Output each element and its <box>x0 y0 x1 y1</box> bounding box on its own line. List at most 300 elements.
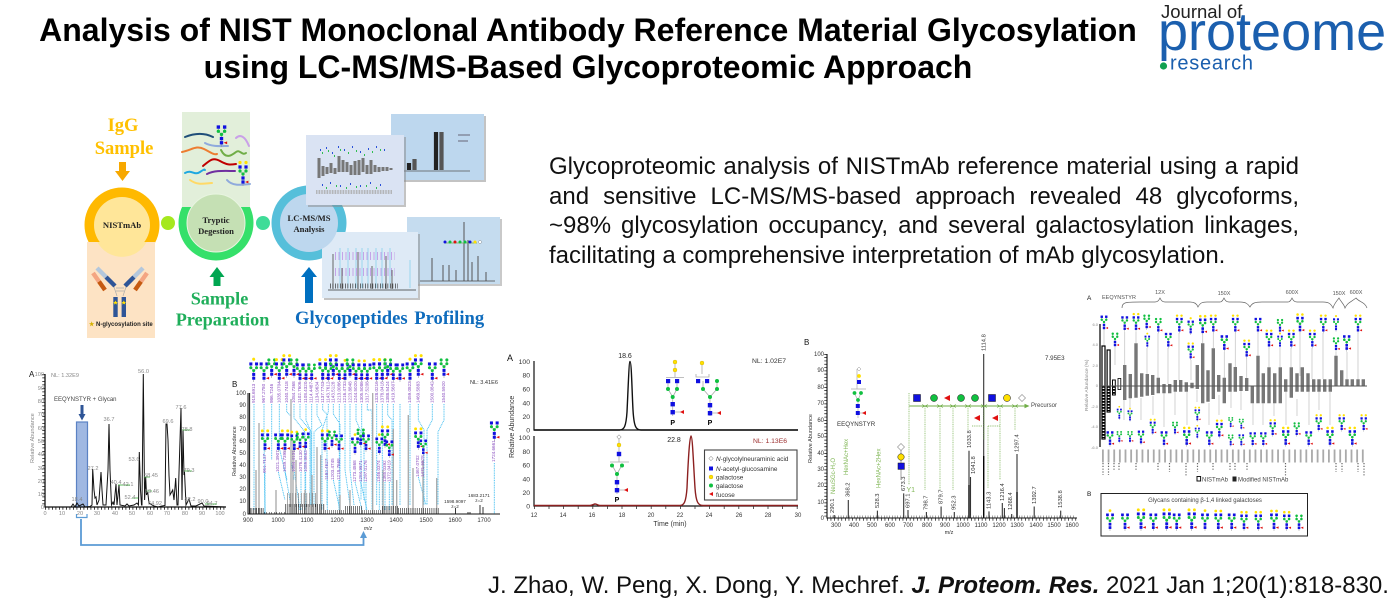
top m/z labels: 1469.5883 <box>416 381 420 403</box>
y tick labels <box>519 359 530 510</box>
x tick labels: 300 <box>831 523 842 529</box>
top m/z labels: 1035.0704 <box>276 381 282 403</box>
x tick labels: 1100 <box>975 523 988 529</box>
thumbnail legend <box>458 135 470 141</box>
y tick labels: 60 <box>522 386 530 394</box>
thumbnail shadow <box>308 137 406 207</box>
y tick labels: 40 <box>817 451 825 457</box>
axis tick labels <box>243 518 491 524</box>
logo text: Journal of: Journal of <box>1161 1 1243 22</box>
zero line <box>1100 385 1367 387</box>
connector dot 2 <box>256 216 270 230</box>
axis tick labels: 1100 <box>301 518 314 524</box>
y axis title: Relative Abundance <box>232 426 238 476</box>
panel letter: B <box>232 380 237 389</box>
lower m/z labels: 951.7137 <box>262 453 267 473</box>
thumbnail: glycan bar chart <box>306 135 406 207</box>
glycan structure 1 <box>666 360 684 427</box>
label: Glycopeptides Profiling: Glycopeptides Profiling <box>295 308 485 329</box>
label: IgG Sample: IgG <box>108 116 138 136</box>
axis tick labels: 50 <box>129 511 135 517</box>
y axis <box>1099 324 1101 447</box>
legend: NISTmAb <box>1202 478 1229 484</box>
x tick labels: 18 <box>619 513 626 519</box>
y tick labels: 20 <box>38 479 44 485</box>
lower m/z labels: 1372.0419 <box>386 460 392 482</box>
top m/z labels: 1216.4732 <box>342 381 347 403</box>
top m/z labels: 1108.4320 <box>303 381 308 403</box>
lower m/z labels: 1346.0374 <box>376 460 381 482</box>
x axis title: m/z <box>364 526 373 532</box>
black noise <box>250 393 483 514</box>
x tick labels: 20 <box>648 513 655 519</box>
peak labels: 952.3 <box>952 495 958 510</box>
x tick labels: 400 <box>849 523 860 529</box>
NL bottom: NL: 1.13E6 <box>753 438 787 445</box>
x tick labels: 600 <box>885 523 896 529</box>
charge labels: 1683.2171 <box>468 493 490 498</box>
top m/z labels: 918.6913 <box>251 383 256 403</box>
y tick labels: 70 <box>817 401 825 407</box>
lower m/z labels: 1471.5828 <box>420 455 425 477</box>
fragment labels green: Y1 <box>906 487 915 494</box>
axis tick labels: 100 <box>215 511 225 517</box>
panel letter: B <box>1087 491 1091 498</box>
peak labels: 82.2 <box>185 497 195 503</box>
y tick labels <box>236 391 247 518</box>
peak labels: 36.7 <box>104 417 114 423</box>
citation: J. Zhao, W. Peng, X. Dong, Y. Mechref. J. Proteom. Res. 2021 Jan 1;20(1):818-830. <box>488 572 1389 599</box>
thumbnail axis <box>400 170 470 172</box>
top trace <box>534 362 798 430</box>
y tick labels: 30 <box>38 466 44 472</box>
glycan structure 3 <box>610 435 629 504</box>
legend: fucose <box>716 492 735 499</box>
lower glycans <box>261 421 499 458</box>
gray spectrum peaks <box>256 393 437 514</box>
y tick labels: 90 <box>239 403 247 409</box>
thumbnail cyan guides <box>340 248 410 288</box>
panel: galactose linkage glycans <box>1087 491 1308 536</box>
y axis title: Relative Abundance <box>509 396 516 458</box>
thumbnail: annotated MS1 spectrum <box>322 232 420 300</box>
cyan guide lines <box>254 404 494 514</box>
peak labels: 78.8 <box>182 427 192 433</box>
y tick labels: 80 <box>38 399 44 405</box>
lower m/z labels: 1724.6661 <box>491 440 496 462</box>
y tick labels: 40 <box>522 476 530 484</box>
fragment labels green: NeuSGc-H₂O <box>831 458 837 494</box>
y tick labels: -6.0 <box>1091 445 1099 450</box>
logo text: research: research <box>1170 52 1253 74</box>
LC-MS ring <box>272 186 346 260</box>
panel letter: A <box>1087 295 1092 302</box>
glycan structure 1: P <box>670 420 675 427</box>
y tick labels: 0 <box>41 505 44 511</box>
composition label columns <box>1102 450 1365 462</box>
axis tick labels: 90 <box>199 511 205 517</box>
logo dot <box>1160 62 1167 70</box>
x tick labels: 1200 <box>992 523 1006 529</box>
y axis ticks <box>824 354 827 518</box>
y tick labels: 50 <box>38 439 44 445</box>
glycan structure 2: P <box>708 420 713 427</box>
peak labels: 59.46 <box>145 489 159 495</box>
axis tick labels: 10 <box>59 511 65 517</box>
label: Precursor: Precursor <box>1031 403 1057 409</box>
y tick labels: 20 <box>817 483 825 489</box>
y tick labels: 100 <box>35 372 44 378</box>
thumbnail glycan dots green <box>322 150 381 188</box>
y tick labels: 20 <box>522 414 530 421</box>
charge labels <box>444 493 490 509</box>
axis tick labels: 0 <box>43 511 47 517</box>
x tick labels <box>831 523 1079 529</box>
NISTmAb peach panel <box>87 242 155 338</box>
black peak bases <box>969 456 1017 518</box>
y axis title: Relative Abundance <box>808 414 814 463</box>
scale labels <box>1155 290 1363 297</box>
panel: workflow sample step <box>84 116 160 338</box>
y tick labels: 60 <box>522 462 530 470</box>
peak labels: 1216.4 <box>1000 482 1006 501</box>
axis tick labels: 1000 <box>271 518 285 524</box>
summary text block <box>549 153 1299 269</box>
axis tick labels: 1400 <box>389 518 403 524</box>
lower m/z labels: 1076.4130 <box>298 450 303 472</box>
bottom axes <box>534 436 798 506</box>
label: Sample Preparation <box>176 288 269 330</box>
summary text block: ~98% glycosylation occupancy, and several galactosylation linkages, <box>549 212 1299 239</box>
y tick labels <box>814 352 825 522</box>
axis tick labels: 900 <box>243 518 254 524</box>
top m/z labels <box>251 381 446 403</box>
peptides with glycans <box>182 134 250 185</box>
top m/z labels: 1244.5020 <box>353 381 358 403</box>
peak labels: 18.4 <box>72 497 82 503</box>
axis tick labels: 70 <box>164 511 170 517</box>
peak labels: 56.0 <box>138 369 149 375</box>
NISTmAb centre <box>94 197 150 253</box>
thumbnail: annotated MS2 spectrum <box>407 217 502 286</box>
braces <box>1122 298 1367 308</box>
scale labels: 150X <box>1218 291 1231 297</box>
peak labels: 697.1 <box>906 493 912 508</box>
peak labels: 40.4 <box>111 480 121 486</box>
peak labels: 94.7 <box>207 501 217 507</box>
lower m/z labels: 1273.4868 <box>352 460 357 482</box>
y tick labels: 60 <box>817 418 825 424</box>
connector lines <box>1104 331 1358 427</box>
arrow: preparation up <box>210 267 224 286</box>
panel letter: A <box>507 353 513 363</box>
plus markers <box>1103 463 1364 477</box>
y tick labels: 40 <box>38 452 44 458</box>
thumbnail background <box>306 135 404 205</box>
glycans below <box>1107 406 1367 447</box>
legend: N-glycolylneuraminic acid <box>716 456 789 463</box>
thumbnail purple labels <box>335 256 395 272</box>
icon: antibody <box>93 268 147 317</box>
top axes <box>534 361 798 430</box>
tryptic ring <box>178 186 254 260</box>
top glycans <box>249 354 449 382</box>
y tick labels: 80 <box>522 449 530 456</box>
axis tick labels: 80 <box>182 511 188 517</box>
link line <box>81 519 364 545</box>
label: LC-MS/MS Analysis: Analysis <box>293 224 325 234</box>
lower m/z labels: 1297.0176 <box>363 460 368 482</box>
axis tick labels: 1700 <box>477 518 491 524</box>
peak labels: 1297.4 <box>1014 433 1020 452</box>
x tick labels: 1400 <box>1029 523 1043 529</box>
glycans above <box>1101 313 1362 360</box>
open bars <box>1102 346 1121 439</box>
axis tick labels <box>43 511 225 517</box>
x tick labels: 500 <box>867 523 878 529</box>
x tick labels <box>531 513 802 519</box>
axis tick labels: 20 <box>77 511 83 517</box>
peak labels: 1143.3 <box>986 492 992 509</box>
axes <box>45 374 226 507</box>
chromatogram trace <box>45 374 226 507</box>
lower m/z labels: 1467.0702 <box>415 455 420 477</box>
NL value: NL: 3.41E6 <box>470 380 498 386</box>
y axis title: Relative Abundance (%) <box>1084 359 1090 411</box>
lower m/z labels: 1084.4131 <box>291 450 296 472</box>
x tick labels: 30 <box>795 513 802 519</box>
top m/z labels: 1388.5424 <box>385 381 390 403</box>
top m/z labels: 1040.7418 <box>284 381 289 403</box>
panel letter: B <box>804 338 809 347</box>
y tick labels: -2.0 <box>1091 404 1099 409</box>
axis tick labels: 40 <box>112 511 118 517</box>
y tick labels <box>1091 322 1099 450</box>
lower m/z labels: 1365.0392 <box>382 460 387 482</box>
peak labels: 1392.7 <box>1032 486 1038 504</box>
x tick labels: 14 <box>560 513 567 519</box>
scale labels: 600X <box>1286 290 1299 296</box>
axes <box>827 354 1077 518</box>
y tick labels: 6.0 <box>1092 322 1099 327</box>
y tick labels: 80 <box>817 385 825 391</box>
intensity: 7.95E3 <box>1045 355 1065 362</box>
thumbnail guides <box>445 242 477 244</box>
x tick labels: 26 <box>736 513 743 519</box>
peak labels: 27.2 <box>88 466 98 472</box>
top m/z labels: 1143.5128 <box>330 381 336 403</box>
arrow: link A to B <box>76 514 367 545</box>
thumbnail axis <box>420 280 495 282</box>
peak labels: 64.92 <box>148 501 162 507</box>
fragment labels green: HexNAc+2Hex <box>876 448 882 488</box>
x tick labels: 28 <box>765 513 772 519</box>
y tick labels: 30 <box>817 467 825 473</box>
top m/z labels: 1459.0823 <box>407 381 412 403</box>
connector dot 1 <box>161 216 175 230</box>
y tick labels: 70 <box>239 427 247 433</box>
charge labels: z=2 <box>475 498 483 503</box>
top m/z labels: 1137.7743 <box>320 381 325 403</box>
lower m/z labels: 1021.3907 <box>275 450 280 472</box>
peak labels: 53.6 <box>129 457 139 463</box>
y tick labels: 10 <box>817 500 825 506</box>
y tick labels: 30 <box>239 475 247 481</box>
top m/z labels: 1114.4487 <box>308 382 314 403</box>
scale labels: 600X <box>1350 290 1363 296</box>
thumbnail background <box>407 217 500 284</box>
journal logo <box>1158 1 1386 74</box>
x tick labels: 1000 <box>956 523 970 529</box>
x tick labels: 16 <box>589 513 596 519</box>
y tick labels: 60 <box>38 426 44 432</box>
NL top: NL: 1.02E7 <box>752 358 786 365</box>
lower m/z labels <box>262 440 496 482</box>
y tick labels <box>35 372 44 511</box>
fragment symbols <box>914 394 1026 421</box>
scale labels: 150X <box>1333 291 1346 297</box>
tick marks <box>45 507 226 510</box>
top m/z labels: 1317.5208 <box>364 381 370 403</box>
legend: N-acetyl-glucosamine <box>716 466 778 473</box>
logo text: proteome: proteome <box>1158 2 1386 62</box>
peak labels <box>830 334 1064 513</box>
peak labels: 528.3 <box>875 493 881 508</box>
y tick labels: 0 <box>526 428 530 434</box>
y tick labels: 2.0 <box>1092 363 1099 368</box>
thumbnail background <box>322 232 418 298</box>
retention labels: 18.6 <box>618 353 632 360</box>
top m/z labels: 1305.5086 <box>359 381 364 403</box>
LC-MS centre <box>280 194 338 252</box>
x ticks <box>534 506 798 509</box>
peak labels: 90.0 <box>198 499 208 505</box>
y tick labels: 0 <box>243 512 247 518</box>
baseline noise <box>830 516 1074 518</box>
thumbnail noise <box>330 284 398 288</box>
glycan B <box>238 161 248 186</box>
chart: glycan abundance butterfly <box>1084 290 1367 484</box>
lower m/z labels: 1089.8663 <box>303 450 308 472</box>
y tick labels: 0 <box>821 516 825 522</box>
chart: base peak chromatogram A <box>29 369 226 517</box>
label: IgG Sample: Sample <box>95 139 153 159</box>
thumbnail shadow <box>324 234 420 300</box>
lower m/z labels: 1182.4527 <box>324 458 329 480</box>
retention labels <box>618 353 681 444</box>
thumbnail shadow <box>409 219 502 286</box>
thumbnail labels <box>316 190 392 194</box>
label: Sample Preparation: Preparation <box>176 310 269 330</box>
top m/z labels: 1143.7612 <box>326 381 330 403</box>
panel: workflow preparation step <box>176 112 269 330</box>
charge labels: 1598.9097 <box>444 499 466 504</box>
y tick labels: 50 <box>817 434 825 440</box>
peak labels: 77.6 <box>176 405 186 411</box>
y tick labels: 20 <box>239 487 247 493</box>
fragment glycan on peak <box>898 444 904 480</box>
thumbnail peaks <box>432 222 486 281</box>
y tick labels: 100 <box>236 391 247 397</box>
thumbnail glycan dots blue <box>320 147 385 186</box>
lower m/z labels: 1039.7398 <box>282 450 287 472</box>
legend: galactose <box>716 483 744 490</box>
arrow head <box>360 531 367 538</box>
peaks <box>834 354 1061 518</box>
y tick labels: 60 <box>239 439 247 445</box>
peak labels: 52.4 <box>125 495 135 501</box>
y tick labels: 40 <box>522 400 530 408</box>
peak labels: 1041.8 <box>971 456 977 474</box>
top m/z labels: 986.7246 <box>269 383 274 403</box>
legend: galactose <box>716 474 744 482</box>
y tick labels: 100 <box>519 435 530 442</box>
lower m/z labels: 1284.9871 <box>358 460 363 482</box>
y tick labels: 80 <box>239 415 247 421</box>
y tick labels: 0 <box>1096 383 1099 388</box>
top m/z labels: 967.2780 <box>261 383 266 403</box>
thumbnail bars <box>319 156 391 178</box>
y tick labels: 40 <box>239 463 247 469</box>
retention labels: 22.8 <box>667 437 681 444</box>
x tick labels: 22 <box>677 513 684 519</box>
thumbnail symbols row <box>444 240 482 244</box>
arrow: to highlighted peak <box>78 405 86 420</box>
axis tick labels: 1200 <box>330 518 344 524</box>
axis tick labels: 1300 <box>360 518 374 524</box>
x tick labels: 12 <box>531 513 538 519</box>
axes <box>248 393 500 514</box>
glycan structure 3: P <box>615 497 620 504</box>
glycan A <box>217 125 227 147</box>
lower m/z labels: 1203.4745 <box>330 458 335 480</box>
scale labels: 12X <box>1155 290 1165 296</box>
y tick labels: 100 <box>519 359 530 366</box>
NISTmAb ring <box>84 188 160 262</box>
axis tick labels: 30 <box>94 511 100 517</box>
title <box>39 12 1137 85</box>
charge labels: z=2 <box>451 504 459 509</box>
label: N-glycosylation site: ★ N-glycosylation site <box>89 321 153 328</box>
label: IgG Sample <box>95 116 153 159</box>
bottom trace <box>534 436 798 506</box>
glycan structure 2 <box>696 361 721 427</box>
y tick labels: 100 <box>814 352 825 358</box>
panel: workflow analysis step <box>280 194 485 329</box>
y tick labels: 50 <box>239 451 247 457</box>
top m/z labels: 1328.0216 <box>374 381 379 403</box>
green digest panel <box>182 112 250 207</box>
x tick labels: 700 <box>903 523 914 529</box>
label: NISTmAb: NISTmAb <box>103 220 141 230</box>
peak labels: 1538.8 <box>1058 490 1064 508</box>
gray bars <box>1125 343 1363 403</box>
label: Tryptic Degestion <box>198 215 234 236</box>
label: LC-MS/MS Analysis: LC-MS/MS <box>288 213 331 223</box>
top m/z labels: 1223.8848 <box>348 381 352 403</box>
y tick labels: 0 <box>526 504 530 510</box>
panel box <box>1101 494 1308 536</box>
peak labels: 673.3 <box>901 476 907 491</box>
label: Tryptic Degestion: Degestion <box>198 226 234 236</box>
thumbnail: bar chart <box>391 114 486 182</box>
x tick labels: 800 <box>922 523 933 529</box>
peak labels: 368.2 <box>846 482 852 497</box>
top m/z labels: 1213.0086 <box>336 381 342 403</box>
peak labels: 58.45 <box>144 473 158 479</box>
peak labels: 69.6 <box>163 419 173 425</box>
x axis title: m/z <box>945 530 954 536</box>
